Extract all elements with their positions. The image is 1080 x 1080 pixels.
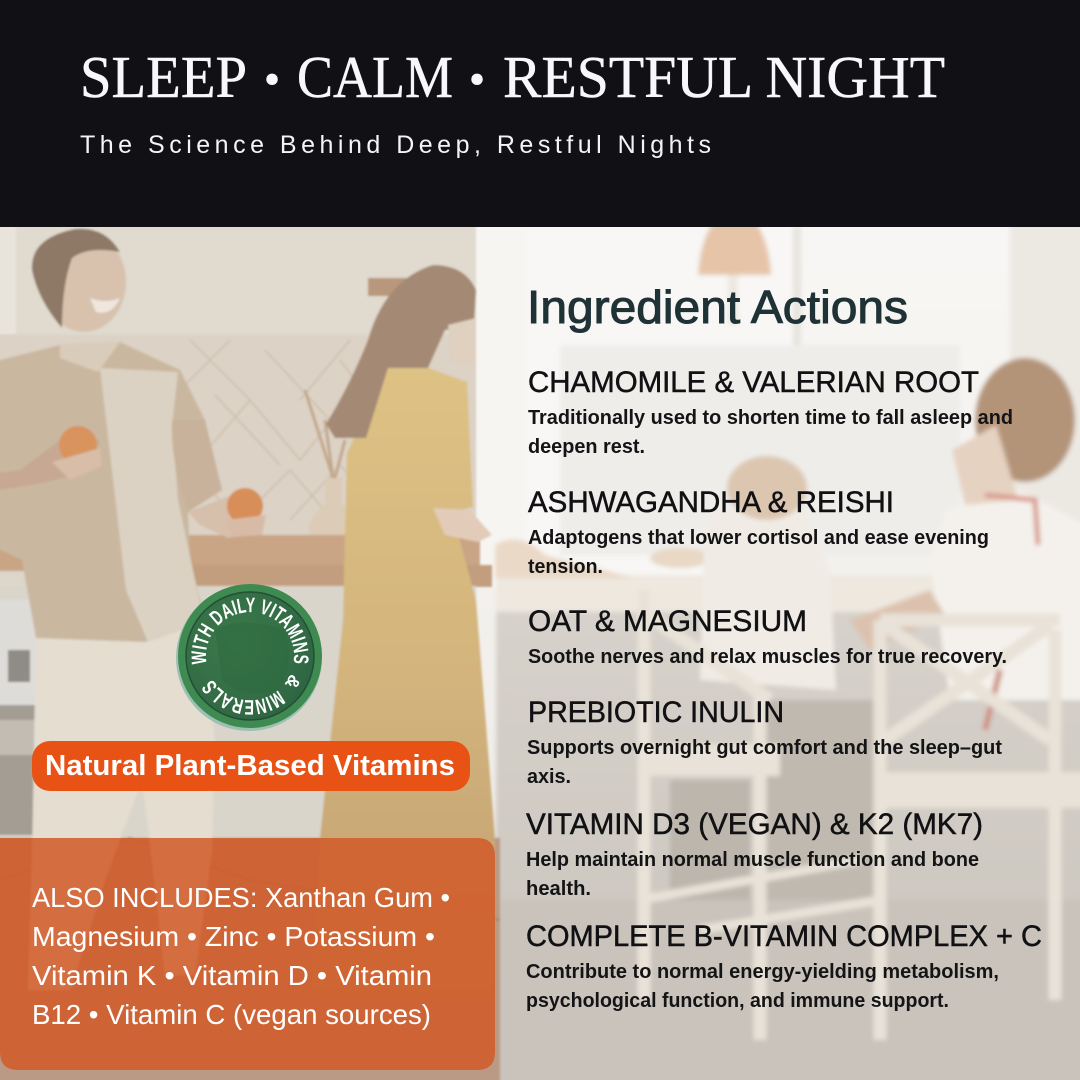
photo: children at window (right) (470, 200, 1080, 1080)
panel: also includes: ALSO INCLUDES: Xanthan Gum • (32, 882, 450, 913)
ingredient: vitamin D3 and K2: Help maintain normal muscle function and bone (526, 848, 979, 871)
ingredient: B-vitamin complex (526, 920, 1042, 1012)
woman hair (326, 265, 476, 438)
ingredient: oat and magnesium (528, 605, 1007, 668)
chairs (640, 590, 1080, 1040)
ingredient: ashwagandha and reishi (528, 486, 989, 578)
ingredient: B-vitamin complex: Contribute to normal energy-yielding metabolism, (526, 960, 999, 983)
ingredient: oat and magnesium: OAT & MAGNESIUM (528, 605, 807, 638)
ingredient: ashwagandha and reishi: ASHWAGANDHA & REISHI (528, 486, 894, 519)
woman face and arm (448, 318, 476, 365)
man shirt (0, 342, 222, 642)
heading: Ingredient Actions: Ingredient Actions (527, 281, 908, 333)
badge: with daily vitamins and minerals (176, 584, 322, 731)
panel: also includes: B12 • Vitamin C (vegan sources) (32, 999, 431, 1030)
ingredient: chamomile and valerian: CHAMOMILE & VALERIAN ROOT (528, 366, 979, 399)
floor (0, 838, 500, 1080)
header band (0, 0, 1080, 227)
child 1 (700, 505, 836, 690)
lamp (698, 220, 771, 275)
man arm (0, 440, 100, 492)
title (80, 44, 945, 110)
title: SLEEP (80, 44, 247, 110)
badge: with daily vitamins and minerals: WITH DAILY VITAMINS (191, 598, 309, 664)
ingredient: chamomile and valerian: Traditionally used to shorten time to fall asleep and (528, 406, 1013, 429)
oranges (59, 426, 97, 464)
vase (309, 478, 356, 550)
badge: with daily vitamins and minerals: MINERALS (202, 680, 286, 715)
ingredient: chamomile and valerian (528, 366, 1013, 458)
head (42, 232, 126, 332)
ingredient: B-vitamin complex: COMPLETE B-VITAMIN COMPLEX + C (526, 920, 1042, 953)
ingredient: prebiotic inulin (527, 696, 1002, 788)
man trousers (28, 630, 215, 990)
pill: natural plant-based vitamins: Natural Plant-Based Vitamins (45, 750, 455, 782)
oven (0, 600, 36, 710)
ingredient: vitamin D3 and K2 (526, 808, 983, 900)
child 2 (930, 490, 1080, 700)
title: • (264, 53, 280, 106)
ingredient: prebiotic inulin: Supports overnight gut comfort and the sleep–gut (527, 736, 1002, 759)
ingredient: vitamin D3 and K2: health. (526, 877, 591, 900)
ingredient: ashwagandha and reishi: Adaptogens that lower cortisol and ease evening (528, 526, 989, 549)
ingredient: oat and magnesium: Soothe nerves and relax muscles for true recovery. (528, 645, 1007, 668)
subtitle: The Science Behind Deep, Restful Nights (80, 131, 711, 159)
panel: also includes: Magnesium • Zinc • Potassium • (32, 921, 435, 952)
ingredient: ashwagandha and reishi: tension. (528, 555, 603, 578)
badge: with daily vitamins and minerals: & (284, 675, 300, 687)
ingredient: chamomile and valerian: deepen rest. (528, 435, 645, 458)
panel: also includes: Vitamin K • Vitamin D • Vitamin (32, 960, 432, 991)
title: RESTFUL NIGHT (503, 44, 945, 110)
woman dress (310, 365, 495, 1000)
ingredient: prebiotic inulin: axis. (527, 765, 571, 788)
table (496, 575, 1080, 613)
title: CALM (297, 44, 453, 110)
pill: natural plant-based vitamins (32, 741, 470, 791)
ingredient: B-vitamin complex: psychological function, and immune support. (526, 989, 949, 1012)
ingredient: prebiotic inulin: PREBIOTIC INULIN (528, 696, 784, 729)
ingredient: vitamin D3 and K2: VITAMIN D3 (VEGAN) & K2 (MK7) (526, 808, 983, 841)
panel: also includes (0, 838, 495, 1070)
title: • (469, 53, 485, 106)
lower wall and floor (496, 612, 1080, 1080)
photo: parents in kitchen (left) (0, 200, 500, 1080)
counter (0, 535, 480, 571)
